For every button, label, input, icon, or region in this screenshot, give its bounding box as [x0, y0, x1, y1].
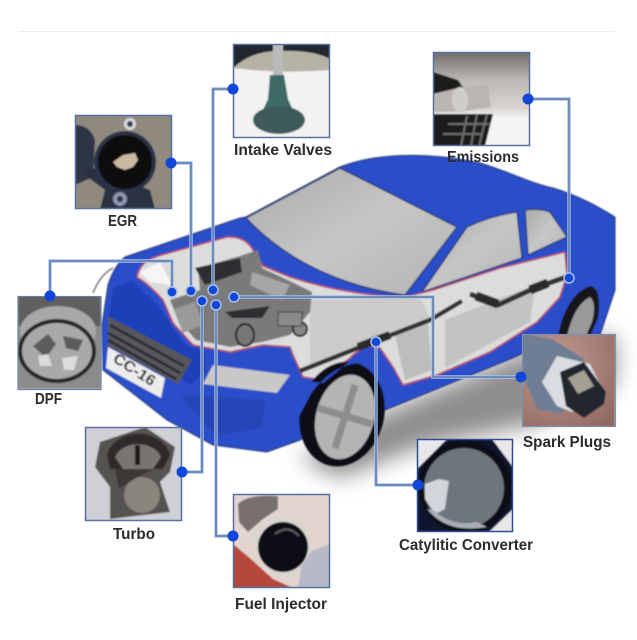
photo: catalytic converter — [418, 440, 512, 531]
dot: spark plugs — [516, 372, 526, 382]
photo: spark plug — [523, 335, 615, 426]
photo: turbo — [86, 428, 181, 520]
dot: intake valves — [228, 84, 238, 94]
engine anchor dots — [167, 273, 574, 347]
frame: fuel injector — [234, 494, 330, 588]
hood front panel — [108, 281, 205, 385]
label: DPF: DPF — [35, 391, 62, 408]
cutaway interior — [137, 237, 567, 385]
side window front — [422, 212, 522, 292]
photo: fuel injector — [234, 495, 329, 587]
grille — [108, 316, 192, 384]
top rule — [18, 31, 615, 32]
rear wheel — [558, 286, 599, 336]
line: turbo — [182, 301, 202, 472]
bumper shading — [180, 395, 265, 436]
line: fuel injector — [216, 305, 233, 536]
engine block — [170, 250, 312, 347]
panel: Emissions — [433, 52, 534, 166]
car shadow — [300, 335, 615, 478]
label: turbo: Turbo — [113, 526, 155, 543]
label: spark plugs: Spark Plugs — [523, 434, 611, 451]
panel: EGR — [75, 115, 176, 230]
panel: Spark Plugs — [516, 334, 616, 451]
fog lamp panel — [203, 365, 290, 393]
photo: emissions — [434, 53, 529, 145]
label: catalytic converter: Catylitic Converter — [399, 537, 533, 554]
photo: intake valve — [234, 45, 329, 136]
nose fold — [93, 268, 113, 293]
front fender — [297, 351, 403, 420]
line cores — [50, 89, 569, 536]
connector lines and anchor dots — [50, 89, 574, 536]
front wheel — [288, 352, 396, 476]
license plate — [106, 347, 165, 398]
side window rear — [525, 209, 567, 255]
frame: catalytic converter — [418, 440, 512, 532]
panel: Intake Valves — [228, 44, 332, 159]
license plate: CC-16 — [110, 350, 158, 390]
photo: EGR — [76, 116, 171, 208]
frame: spark plug — [522, 334, 616, 426]
line: emissions — [528, 99, 569, 278]
photo: DPF — [18, 297, 100, 389]
dot: EGR — [166, 158, 176, 168]
dot: catalytic converter — [412, 480, 424, 490]
frame: EGR — [76, 116, 172, 208]
dot: emissions — [522, 94, 534, 104]
dot: fuel injector — [228, 530, 238, 542]
label: fuel injector: Fuel Injector — [235, 596, 327, 613]
dot: DPF — [44, 290, 56, 302]
windshield — [246, 168, 457, 295]
frame: turbo — [86, 428, 182, 520]
line: catalytic converter — [376, 342, 418, 485]
panel: DPF — [18, 290, 101, 408]
panel: Fuel Injector — [228, 494, 330, 613]
cabin floor shading — [140, 262, 535, 380]
line: spark plugs — [234, 297, 521, 377]
frame: intake valve — [234, 44, 330, 138]
line: intake valves — [213, 89, 233, 290]
dot: turbo — [176, 466, 188, 478]
label: emissions: Emissions — [447, 149, 519, 166]
label: EGR: EGR — [108, 213, 137, 230]
line: DPF — [50, 261, 172, 296]
label: intake valves: Intake Valves — [234, 142, 332, 159]
exhaust pipe — [300, 276, 569, 371]
line: EGR — [171, 163, 191, 291]
car illustration — [93, 155, 615, 476]
panel: Catalytic Converter — [399, 439, 533, 554]
frame: DPF — [18, 296, 101, 390]
car body — [102, 155, 615, 452]
frame: emissions — [434, 52, 530, 146]
panel: Turbo — [85, 427, 188, 543]
